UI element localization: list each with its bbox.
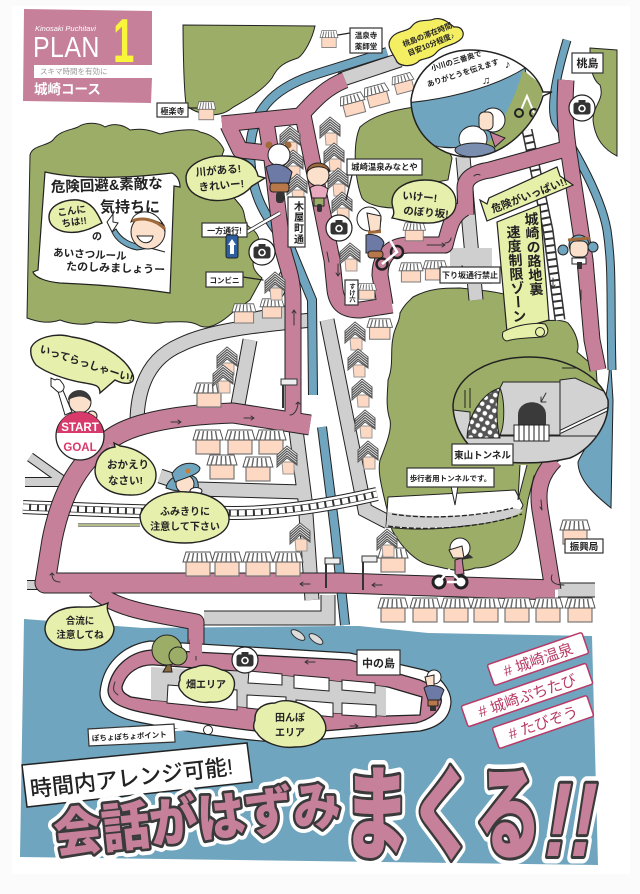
label: Higashiyama tunnel: 東山トンネル [454,450,511,462]
island cyclist [424,670,444,711]
traffic signals [281,379,377,590]
panel: riverside photo bubble: 小川の三番奥で [430,48,483,73]
label: pedestrian tunnel [407,468,494,505]
panel: riverside photo bubble: ありがとうを伝えます [426,56,500,89]
railway ladder: east [527,130,560,320]
label: no downhill [440,266,500,283]
label: splashy point: ぽちょぽちょポイント [92,730,167,743]
tunnel stone wall [467,388,500,438]
connector road crossing onto the island [190,622,202,656]
scroll panel: greeting rule: 危険回避&素敵な [51,174,163,196]
bubble: welcome back: なさい! [108,475,143,487]
tree on the island [152,635,187,672]
route arrows [50,174,581,587]
main heading: conversation keeps bouncing: 会話がはずみ [51,775,344,864]
hashtag: Kinosaki Onsen: # 城崎温泉 [501,641,576,680]
bubble: uphill [392,180,456,223]
scroll panel: greeting rule [33,172,180,293]
bubble: river is pretty [186,156,265,200]
bubble: mind the crossing: ふみきりに [160,506,210,518]
bubble: mind the crossing: 注意して下さい [150,520,220,533]
bubble: welcome back: おかえり [107,459,149,471]
panel: riverside photo bubble [410,49,552,158]
hashtag: Tabizo [492,695,594,749]
title panel: PLAN 1: 城崎コース [34,81,101,97]
label: Onsenji Yakushido: 薬師堂 [355,41,378,51]
label: one way: 一方通行! [207,226,242,236]
bubble: hello: ちは!! [61,216,87,230]
label: Higashiyama tunnel [452,444,527,500]
lake: east pond [578,352,613,508]
scroll body [497,205,549,332]
character: blue helmet cyclist [558,235,598,269]
forest: north hill [183,25,315,115]
main heading: conversation keeps bouncing: まくる [343,760,542,873]
label: Sukeroku: すけ六 [348,283,356,304]
title panel: PLAN 1: PLAN [33,31,100,63]
label: one way [202,213,280,258]
label: Gokurakuji temple [157,103,197,117]
scroll panel: greeting rule: 気持ちに [100,198,160,216]
hashtag: Tabizo: # たびぞう [506,704,581,743]
railway [23,494,377,513]
bubble: merge caution: 注意してね [56,629,104,641]
bubble: uphill: いけー! [402,190,438,205]
cloud label: field area: 畑エリア [186,678,226,691]
panel: Higashiyama tunnel view [450,357,612,470]
scroll panel: greeting rule: あいさつルール [53,247,127,263]
tunnel fence [514,425,549,441]
label: Momoshima [572,53,603,73]
cloud label: rice paddy area [254,701,326,747]
main heading: conversation keeps bouncing: 会話がはずみ [51,775,344,864]
character: railway crossing guard [166,463,202,494]
label: Onsenji Yakushido [338,28,382,53]
main heading: conversation keeps bouncing: !! [536,761,608,879]
label: Kiyamachi street: 木屋町通 [292,200,304,245]
cloud label: rice paddy area: 田んぼ [275,711,305,724]
character: girl cyclist [433,538,473,588]
tunnel path: pedestrian tunnel with dashed edge [386,490,523,529]
bubble: river is pretty: きれいー! [198,178,245,194]
label: Onsenji Yakushido: 温泉寺 [355,30,378,40]
main heading: conversation keeps bouncing: !! [536,761,608,879]
label: convenience store [206,272,263,287]
scroll panel: greeting rule: の [92,232,102,243]
bubble: river is pretty: 川がある! [195,162,242,179]
label: Sukeroku [345,280,358,305]
boats [289,628,325,646]
couple seen from behind [458,126,488,145]
island shore [100,641,451,742]
icon: one-way sign [226,235,238,258]
ribbon [480,167,573,221]
bubble: hello [49,200,102,232]
start and goal marker: START [61,422,99,434]
scroll roll [502,323,548,341]
bubble: off you go: いってらっしゃーい! [38,343,134,385]
bubble: uphill: のぼり坂! [403,204,449,221]
bicycle [521,96,534,113]
sub heading: arrangeable within time [22,743,252,807]
forest: centre hill [355,107,452,208]
panel: riverside photo bubble: ♫ [482,75,490,87]
banner: danger-filled back-street speed limit zone: 速度制限ゾーン [505,224,528,323]
label: Momoshima: 桃島 [576,56,598,70]
mascot waving [107,212,165,252]
character: cyclist rear view [266,142,292,203]
label: Nakanoshima: 中の島 [362,656,395,670]
label: pedestrian tunnel: 歩行者用トンネルです。 [410,473,491,483]
island paths and fields [151,667,386,717]
bubble: welcome back [95,443,156,495]
island ring road [108,650,441,733]
main heading: conversation keeps bouncing [51,760,608,879]
water: river mouth [20,619,598,865]
title panel: PLAN 1: 1 [113,6,134,75]
label: Kiyamachi street [288,197,305,247]
character: waving guide [51,378,97,421]
bubble: hello: こんに [57,204,87,219]
cloud label: rice paddy area: エリア [275,727,305,739]
bubble: off you go [31,335,134,393]
forest: Momoshima hill [590,48,617,156]
forest: Higashiyama hill [379,288,600,571]
banner: danger-filled back-street speed limit zone [480,167,573,341]
label: splashy point [88,724,212,746]
tunnel arch [518,402,546,426]
hashtag: Kinosaki Puchitabi [461,663,593,727]
hashtag: Kinosaki Onsen [487,632,589,686]
main heading: conversation keeps bouncing: まくる [343,760,542,873]
label: no downhill: 下り坂通行禁止 [442,270,498,280]
label: convenience store: コンビニ [210,275,240,285]
forest: west hill [27,123,262,327]
start and goal marker: GOAL [63,442,97,454]
hashtag: Kinosaki Puchitabi: # 城崎ぷちたび [476,672,579,721]
camera: island [232,647,258,673]
cycling route: pink roads [45,80,598,662]
bubble: mind the crossing [78,492,229,543]
sub heading: arrangeable within time: 時間内アレンジ可能! [29,754,234,802]
bubble: merge caution [45,603,114,650]
label: Gokurakuji temple: 極楽寺 [160,106,184,116]
bubble: merge caution: 合流に [66,615,94,627]
title panel: PLAN 1: スキマ時間を有効に [40,66,108,76]
label: Shinkokyoku [565,539,603,553]
callout: stay time at Momoshima: 目安10分程度♪ [406,30,456,58]
label: Nakanoshima [357,650,400,675]
start and goal marker [51,378,104,460]
gray side roads [25,60,595,618]
canal: Otani river [250,52,387,625]
callout: stay time at Momoshima: 桃島の滞在時間 [401,20,453,49]
callout: stay time at Momoshima [389,19,463,66]
label: Minatoya: 城崎温泉みなとや [351,162,418,172]
cloud label: field area [179,665,234,702]
panel: riverside photo bubble: ♪ [505,59,510,71]
tunnel portal [500,382,560,435]
label: Shinkokyoku: 振興局 [570,541,598,553]
banner: danger-filled back-street speed limit zone: 危険がいっぱい!! [489,175,569,216]
character: uphill cyclist [357,207,403,270]
banner: danger-filled back-street speed limit zone: 城崎の路地裏 [523,211,545,298]
island: Nakanoshima [100,640,451,742]
houses [183,31,595,622]
character: cyclist with goggles [307,163,330,212]
title panel: PLAN 1 [23,6,152,103]
label: Minatoya [346,159,422,200]
cameras [249,95,595,265]
title panel: PLAN 1: Kinosaki Puchitavi [35,24,96,33]
island interior [122,665,422,716]
scroll panel: greeting rule: たのしみましょうー [66,260,165,276]
canal: east river [553,40,612,370]
